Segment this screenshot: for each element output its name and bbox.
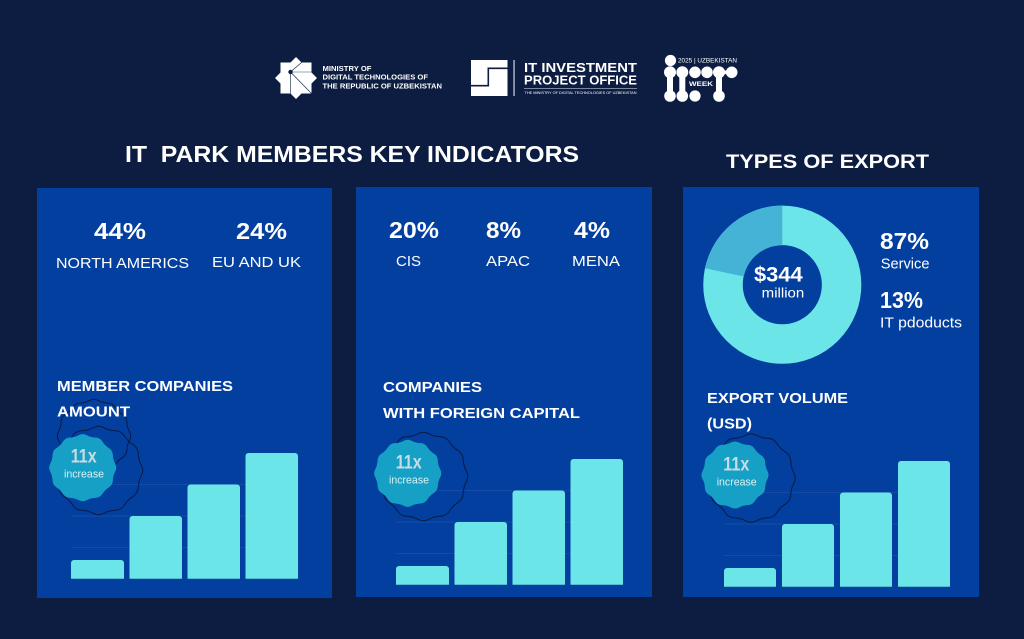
- panel: export: [683, 187, 979, 597]
- heading: member companies amount: [57, 378, 233, 421]
- heading: export volume: EXPORT VOLUME: [707, 390, 848, 407]
- donut center total: $344: [754, 264, 803, 287]
- office name: PROJECT OFFICE: [524, 74, 637, 88]
- legend: IT products share: 13%: [880, 287, 923, 313]
- ministry name: THE REPUBLIC OF UZBEKISTAN: [322, 81, 442, 90]
- callout: 11x increase: 11x: [396, 452, 422, 473]
- heading: companies with foreign capital: [383, 379, 580, 422]
- logo: ICT Week 2025 Uzbekistan: [664, 55, 738, 102]
- bar chart: export volume: [724, 461, 950, 587]
- decorative badge outline: [379, 432, 468, 521]
- callout: 11x increase: 11x: [71, 447, 97, 468]
- callout: 11x increase: [374, 440, 441, 507]
- icon: ministry star: [275, 57, 317, 99]
- legend: service share: Service: [881, 256, 930, 273]
- office name: THE MINISTRY OF DIGITAL TECHNOLOGIES OF UZBEKISTAN: [524, 90, 637, 95]
- title: types of export: TYPES OF EXPORT: [726, 152, 929, 173]
- stat: CIS share: [389, 217, 439, 270]
- donut center total: [754, 264, 804, 300]
- office name: [524, 61, 637, 95]
- icon: square S mark: [471, 60, 515, 96]
- heading: member companies amount: MEMBER COMPANIES: [57, 378, 233, 395]
- callout: 11x increase: increase: [389, 474, 429, 486]
- icon: ICT dots: [664, 55, 738, 102]
- stat: EU and UK share: [212, 218, 301, 271]
- heading: companies with foreign capital: COMPANIES: [383, 379, 482, 396]
- ministry name: [322, 64, 442, 90]
- stat: APAC share: 8%: [486, 217, 521, 243]
- decorative badge outline: [707, 434, 795, 522]
- donut center total: million: [762, 284, 804, 300]
- logo: IT Investment Project Office: [471, 60, 637, 96]
- legend: IT products share: IT pdoducts: [880, 315, 962, 332]
- heading: member companies amount: AMOUNT: [57, 404, 130, 421]
- stat: North America share: NORTH AMERICS: [56, 255, 189, 272]
- callout: 11x increase: [701, 441, 769, 509]
- callout: 11x increase: [49, 434, 116, 501]
- legend: service share: [880, 228, 930, 273]
- week label: WEEK: [689, 82, 714, 88]
- ministry name: DIGITAL TECHNOLOGIES OF: [322, 73, 428, 82]
- heading: export volume: [707, 390, 848, 432]
- logo: Ministry of Digital Technologies: [275, 57, 442, 99]
- stat: MENA share: 4%: [574, 217, 610, 243]
- title: key indicators: IT PARK MEMBERS KEY INDICATORS: [125, 141, 579, 167]
- donut chart: export types: [705, 206, 842, 344]
- stat: CIS share: 20%: [389, 217, 439, 243]
- stat: North America share: [56, 218, 189, 272]
- stat: APAC share: [486, 217, 530, 270]
- panel: foreign capital companies: [356, 187, 652, 597]
- stat: CIS share: CIS: [396, 253, 421, 270]
- legend: IT products share: [880, 287, 962, 332]
- legend: service share: 87%: [880, 228, 929, 254]
- heading: companies with foreign capital: WITH FOREIGN CAPITAL: [383, 405, 580, 422]
- ministry name: MINISTRY OF: [322, 64, 372, 73]
- bar chart: member companies: [71, 453, 298, 579]
- stat: North America share: 44%: [94, 218, 146, 244]
- panel: member companies: [37, 188, 332, 598]
- stat: MENA share: MENA: [572, 253, 620, 270]
- heading: export volume: (USD): [707, 416, 752, 432]
- stat: EU and UK share: 24%: [236, 218, 287, 244]
- stat: EU and UK share: EU AND UK: [212, 254, 301, 271]
- event year and country: 2025 | UZBEKISTAN: [678, 58, 737, 64]
- stat: APAC share: APAC: [486, 253, 530, 270]
- office name: IT INVESTMENT: [524, 61, 637, 75]
- stat: MENA share: [572, 217, 620, 270]
- bar chart: foreign capital: [396, 459, 623, 585]
- callout: 11x increase: increase: [717, 477, 757, 489]
- decorative badge outlines: [54, 399, 143, 515]
- callout: 11x increase: 11x: [723, 455, 750, 476]
- callout: 11x increase: increase: [64, 469, 104, 481]
